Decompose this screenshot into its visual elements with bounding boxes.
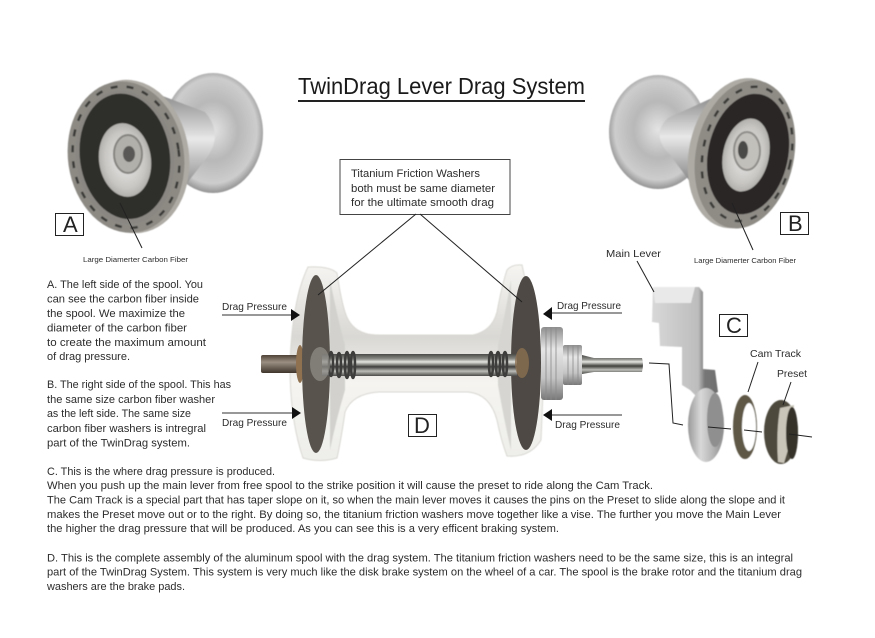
arrow: drag pressure top right: Drag Pressure	[557, 300, 621, 312]
text block: A: can see the carbon fiber inside	[47, 294, 199, 306]
panel: exploded parts C	[637, 261, 812, 464]
preset ring	[764, 400, 798, 464]
rear flange	[609, 75, 707, 189]
front rim	[58, 72, 199, 241]
leader: titanium left	[318, 214, 416, 295]
callout: titanium friction washers: for the ultimate smooth drag	[351, 197, 494, 209]
label B box	[780, 211, 808, 236]
arrow: drag pressure top left: Drag Pressure	[222, 301, 287, 313]
text block: C: C. This is the where drag pressure is produced.	[47, 466, 275, 478]
label: cam track: Cam Track	[750, 348, 802, 360]
text block: B: B. The right side of the spool. This has	[47, 379, 231, 391]
label C box: C	[726, 313, 742, 338]
leader: cam track	[748, 362, 758, 392]
leader: carbon fiber A	[120, 203, 142, 248]
front rim	[674, 68, 809, 239]
panel: spool assembly D	[261, 265, 643, 460]
text block: A: to create the maximum amount	[47, 337, 207, 349]
text block: C: The Cam Track is a special part that has taper slope on it, so when the main lever moves it causes the pins on the Preset to slide along the slope and it	[47, 494, 786, 506]
text block: B	[47, 379, 231, 450]
silver hub	[716, 114, 776, 196]
text block: D: part of the TwinDrag System. This system is very much like the disk brake system on the wheel of a car. The spool is the brake rotor and the titanium drag	[47, 566, 802, 578]
label D box	[408, 413, 436, 438]
arrow: drag pressure top right	[543, 300, 622, 320]
right gears	[541, 327, 582, 400]
axis line: cam to preset	[744, 430, 762, 432]
label: main lever: Main Lever	[606, 248, 662, 260]
bronze bushing	[296, 345, 304, 383]
main shaft	[322, 354, 517, 376]
leader: carbon fiber B	[732, 203, 753, 250]
callout: titanium friction washers: both must be same diameter	[351, 183, 495, 195]
arrow: drag pressure bottom right	[543, 409, 622, 431]
label A box	[56, 212, 84, 237]
arrow: drag pressure bottom right: Drag Pressure	[555, 419, 620, 431]
text block: A: of drag pressure.	[47, 351, 130, 363]
right washer	[511, 276, 541, 450]
flange shading right	[498, 280, 511, 450]
arrow: drag pressure bottom left: Drag Pressure	[222, 417, 287, 429]
silver hub	[94, 120, 156, 200]
spool body	[290, 265, 544, 460]
left washer	[302, 275, 330, 453]
caption: carbon fiber B: Large Diamerter Carbon Fiber	[694, 256, 797, 265]
axis line: preset exit	[789, 434, 812, 437]
arrow: drag pressure bottom left	[222, 407, 301, 429]
label D box: D	[414, 413, 430, 438]
text block: D: D. This is the complete assembly of the aluminum spool with the drag system. The titanium friction washers need to be the same size, this is an integral	[47, 552, 793, 564]
flange shading left	[330, 280, 345, 450]
text block: C: the higher the drag pressure that will be produced. As you can see this is a very efficent braking system.	[47, 523, 559, 535]
arrow: drag pressure top left	[222, 301, 300, 321]
leader: titanium right	[420, 214, 522, 302]
panel: spool B photo	[609, 68, 809, 239]
title: TwinDrag Lever Drag System	[298, 73, 585, 99]
text block: A	[47, 279, 207, 363]
text block: A: the spool. We maximize the	[47, 308, 185, 320]
rear flange	[163, 73, 263, 193]
callout: titanium friction washers: Titanium Friction Washers	[351, 168, 480, 180]
right spring	[489, 352, 507, 376]
text block: C	[47, 466, 786, 535]
caption: carbon fiber A: Large Diamerter Carbon Fiber	[83, 255, 189, 264]
label B box: B	[788, 211, 803, 236]
text block: C: When you push up the main lever from free spool to the strike position it will cause the preset to ride along the Cam Track.	[47, 480, 653, 492]
bearing	[734, 132, 760, 170]
axis line: lever to cam	[708, 427, 731, 429]
left washer hub	[310, 347, 330, 381]
text block: A: diameter of the carbon fiber	[47, 322, 187, 334]
spool neck	[659, 98, 712, 195]
leader: main lever	[637, 261, 654, 292]
text block: D: washers are the brake pads.	[46, 581, 185, 593]
text block: C: makes the Preset move out or to the right. By doing so, the titanium friction washers move together like a vise. The further you move the Main Lever	[47, 509, 781, 521]
cam track ring	[733, 395, 757, 459]
text block: A: A. The left side of the spool. You	[47, 279, 203, 291]
right washer hub	[515, 348, 529, 378]
panel: spool A photo	[58, 72, 263, 241]
label C box	[720, 313, 748, 338]
axis line: shaft to lever	[649, 363, 683, 425]
text block: B: the same size carbon fiber washer	[47, 394, 215, 406]
label A box: A	[63, 212, 78, 237]
label: preset: Preset	[777, 368, 807, 380]
text block: B: part of the TwinDrag system.	[47, 438, 190, 450]
text block: D	[46, 552, 802, 593]
leader: preset	[783, 382, 791, 405]
main lever	[652, 287, 724, 462]
bearing	[114, 135, 142, 173]
right shaft end	[582, 355, 643, 374]
callout: titanium friction washers	[340, 160, 510, 214]
left stub shaft	[261, 355, 299, 373]
left spring	[329, 352, 355, 378]
spool neck	[160, 95, 215, 205]
text block: B: carbon fiber washers is intregral	[47, 423, 206, 435]
text block: B: as the left side. The same size	[47, 408, 191, 420]
